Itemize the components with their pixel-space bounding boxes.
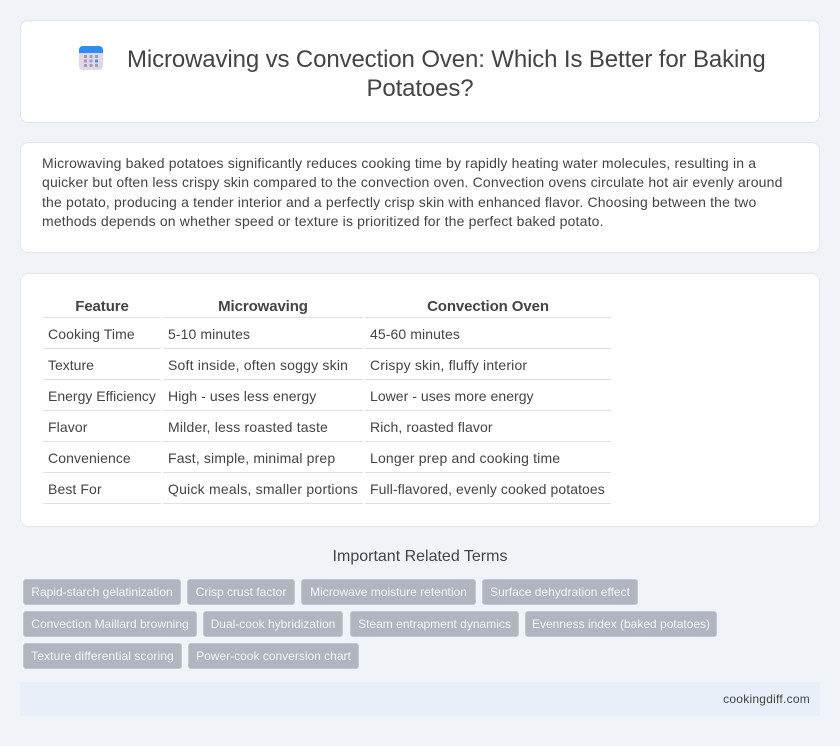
comparison table: Lower - uses more energy: [370, 388, 534, 404]
related terms tags: Crisp crust factor: [196, 585, 286, 599]
comparison table: Crispy skin, fluffy interior: [370, 357, 527, 373]
intro paragraph: the potato, producing a tender interior and a perfectly crisp skin with enhanced flavor. Choosing between the two: [42, 194, 756, 210]
comparison table: Energy Efficiency: [48, 388, 156, 404]
title: Microwaving vs Convection Oven: Which Is Better for Baking: [127, 46, 766, 73]
related terms tags: Rapid-starch gelatinization: [31, 585, 173, 599]
header card: [20, 20, 820, 123]
intro paragraph: Microwaving baked potatoes significantly reduces cooking time by rapidly heating water molecules, resulting in a: [42, 155, 756, 171]
comparison table: Feature: [75, 298, 129, 315]
related terms tags: Dual-cook hybridization: [211, 617, 335, 631]
comparison table: Fast, simple, minimal prep: [168, 450, 335, 466]
icon: calendar: [79, 46, 103, 70]
intro paragraph: [42, 155, 783, 229]
title: Potatoes?: [366, 75, 474, 102]
comparison table: High - uses less energy: [168, 388, 316, 404]
comparison table: Flavor: [48, 419, 88, 435]
comparison table: 5-10 minutes: [168, 326, 250, 342]
comparison table: Texture: [48, 357, 94, 373]
footer source: cookingdiff.com: [723, 692, 810, 706]
footer bar: [20, 682, 820, 716]
related terms tags: Steam entrapment dynamics: [358, 617, 511, 631]
table card: [20, 273, 820, 527]
comparison table: Microwaving: [218, 298, 308, 315]
related terms heading: Important Related Terms: [333, 548, 507, 565]
related terms tags: Evenness index (baked potatoes): [532, 617, 710, 631]
comparison table: Longer prep and cooking time: [370, 450, 560, 466]
related terms tags: Power-cook conversion chart: [196, 649, 351, 663]
related terms tags: Convection Maillard browning: [31, 617, 189, 631]
comparison table: Convection Oven: [427, 298, 549, 315]
intro paragraph: methods depends on whether speed or texture is prioritized for the perfect baked potato.: [42, 213, 604, 229]
related terms tags: Microwave moisture retention: [310, 585, 467, 599]
comparison table: Convenience: [48, 450, 131, 466]
related terms tags: [23, 579, 717, 669]
comparison table: Milder, less roasted taste: [168, 419, 328, 435]
comparison table: Quick meals, smaller portions: [168, 481, 358, 497]
comparison table: 45-60 minutes: [370, 326, 460, 342]
comparison table: Soft inside, often soggy skin: [168, 357, 348, 373]
comparison table: [43, 298, 611, 504]
title: [127, 46, 766, 102]
related terms tags: Surface dehydration effect: [490, 585, 630, 599]
related terms tags: Texture differential scoring: [31, 649, 174, 663]
comparison table: Cooking Time: [48, 326, 135, 342]
comparison table: Rich, roasted flavor: [370, 419, 493, 435]
comparison table: Full-flavored, evenly cooked potatoes: [370, 481, 605, 497]
intro card: [20, 142, 820, 253]
intro paragraph: quicker but often less crispy skin compared to the convection oven. Convection ovens circulate hot air evenly around: [42, 174, 783, 190]
comparison table: Best For: [48, 481, 102, 497]
